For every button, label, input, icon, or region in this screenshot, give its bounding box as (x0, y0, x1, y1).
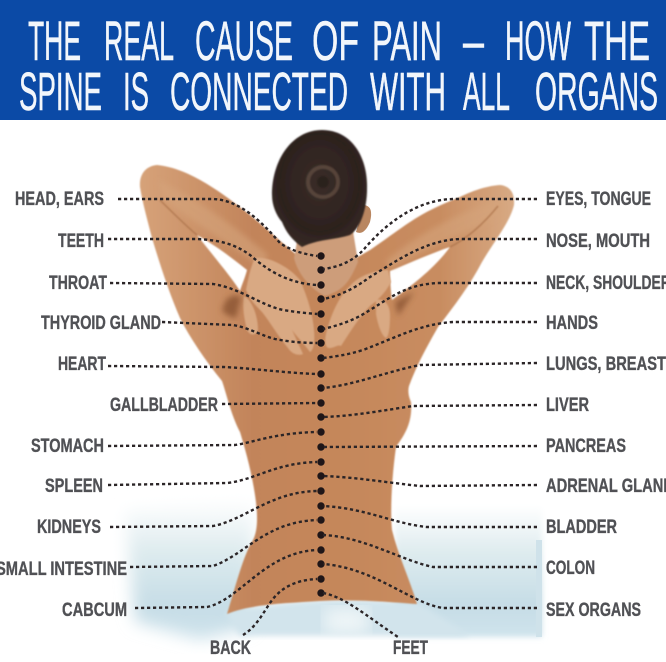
elbow crease lines (160, 200, 498, 247)
labels: right column: HANDS (546, 313, 598, 334)
spine dots (317, 252, 325, 597)
left arm triangle gap (197, 235, 247, 291)
right hand with fingers (325, 270, 391, 348)
title line 1: CAUSE (195, 9, 293, 72)
title line 2: SPINE (19, 62, 102, 122)
labels: left column: KIDNEYS (37, 517, 101, 538)
forearm highlights (158, 180, 502, 268)
title line 1: THE (28, 9, 81, 72)
title line 1: – (463, 9, 485, 72)
left hand with fingers (243, 258, 314, 355)
labels: left column: SMALL INTESTINE (0, 559, 127, 580)
title banner (0, 0, 666, 122)
torso and arms silhouette (140, 165, 514, 614)
ear (356, 205, 371, 233)
labels: left column: STOMACH (31, 436, 104, 457)
title line 2: IS (123, 62, 149, 122)
labels: left column: SPLEEN (45, 476, 103, 497)
water backdrop (125, 500, 542, 640)
right arm triangle gap (390, 247, 450, 300)
title line 2 (19, 62, 658, 122)
neck (294, 225, 358, 296)
hair bun (308, 167, 338, 197)
armpit shadows (222, 292, 414, 318)
labels: right column: LIVER (546, 395, 589, 416)
title line 1: PAIN (372, 9, 442, 72)
labels: right column: BLADDER (546, 517, 617, 538)
hair (272, 130, 367, 247)
dotted connector lines: left side (108, 199, 317, 635)
labels: left column: THROAT (49, 273, 107, 294)
labels: left column: HEART (58, 354, 106, 375)
title line 1: HOW (505, 9, 571, 72)
labels: left column: GALLBLADDER (110, 395, 218, 416)
label: feet: FEET (393, 638, 428, 659)
labels: right column: COLON (546, 558, 595, 579)
title line 2: CONNECTED (170, 62, 348, 122)
title line 2: WITH (370, 62, 446, 122)
dotted connector lines: right side (323, 199, 537, 637)
labels: right column: PANCREAS (546, 436, 626, 457)
labels: left column: CABCUM (62, 600, 127, 621)
title line 2: ALL (463, 62, 510, 122)
label: back: BACK (210, 638, 251, 659)
labels: left column (0, 189, 218, 621)
woman's back figure (140, 130, 514, 614)
labels: right column (546, 189, 666, 621)
labels: left column: HEAD, EARS (15, 189, 104, 210)
title line 1: REAL (104, 9, 174, 72)
title line 1 (28, 9, 650, 72)
labels: left column: TEETH (58, 231, 104, 252)
title line 1: OF (312, 9, 359, 72)
labels: left column: THYROID GLAND (41, 313, 161, 334)
